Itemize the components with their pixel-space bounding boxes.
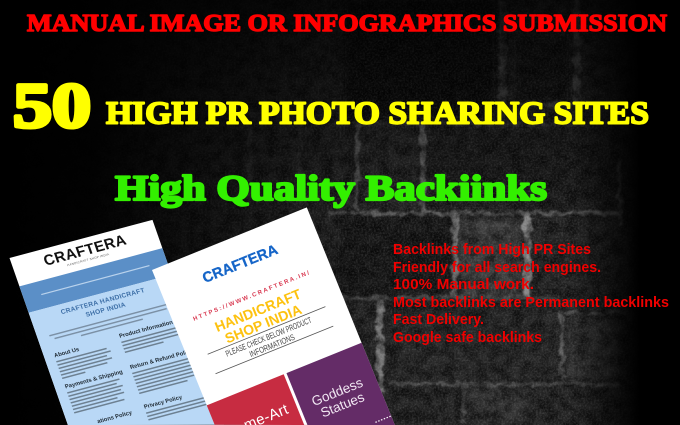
- text block: benefits list: Backlinks from High PR Sites: [393, 241, 591, 258]
- text block: benefits list: [393, 241, 669, 346]
- subtitle: INFORMATIONS: [248, 332, 296, 359]
- rule lines: [208, 307, 333, 374]
- website url: HTTPS://WWW.CRAFTERA.IN/: [193, 270, 312, 323]
- text block: benefits list: Most backlinks are Permanent backlinks: [393, 294, 669, 311]
- panel: left brochure page: [10, 220, 224, 425]
- number 50: 50: [13, 71, 91, 141]
- text block: benefits list: Google safe backlinks: [393, 329, 542, 346]
- headline: SHOP INDIA: [223, 301, 304, 346]
- subtitle: [224, 315, 317, 367]
- brochure section headings: About Us: [53, 347, 80, 359]
- brochure tagline: HANDICRAFT SHOP INDIA: [67, 252, 110, 267]
- brochure section headings: Payments & Shipping: [64, 369, 124, 390]
- heading: manual image or infographics submission: MANUAL IMAGE OR INFOGRAPHICS SUBMISSION: [27, 11, 668, 37]
- brochure section headings: ations Policy: [97, 410, 134, 425]
- brochure title: CRAFTERA HANDICRAFT: [60, 287, 146, 316]
- panel: right brochure page: [152, 207, 395, 425]
- text block: benefits list: Friendly for all search engines.: [393, 259, 601, 276]
- text block: benefits list: 100% Manual work.: [393, 276, 534, 293]
- tile: goddess statues: Goddess: [309, 375, 365, 409]
- brochure title: SHOP INDIA: [85, 302, 127, 319]
- brochure paragraph lines: [55, 326, 209, 425]
- text block: benefits list: Fast Delivery.: [393, 311, 484, 328]
- brochure blue band: [19, 248, 172, 313]
- brochure intro lines: [49, 303, 173, 344]
- brochure section headings: Privacy Policy: [143, 395, 184, 411]
- brochure section headings: Product Information: [119, 320, 174, 340]
- brochure logo: CRAFTERA: [41, 232, 129, 270]
- subtitle: PLEASE CHECK BELOW PRODUCT: [224, 315, 313, 359]
- brochure section headings: [53, 317, 209, 425]
- brochure section headings: Return & Refund Policy: [129, 348, 195, 371]
- heading text: HIGH PR PHOTO SHARING SITES: [106, 94, 649, 130]
- brochure body: [29, 275, 224, 425]
- tile: goddess statues: [286, 343, 395, 425]
- heading: 50 high PR photo sharing sites: [13, 71, 649, 141]
- tile: home-art: [207, 374, 304, 425]
- heading: high quality backlinks: High Quality Backiinks: [115, 168, 547, 208]
- tile: goddess statues: Statues: [318, 389, 367, 420]
- logo: CRAFTERA: [200, 242, 281, 287]
- headline: HANDICRAFT: [212, 285, 304, 335]
